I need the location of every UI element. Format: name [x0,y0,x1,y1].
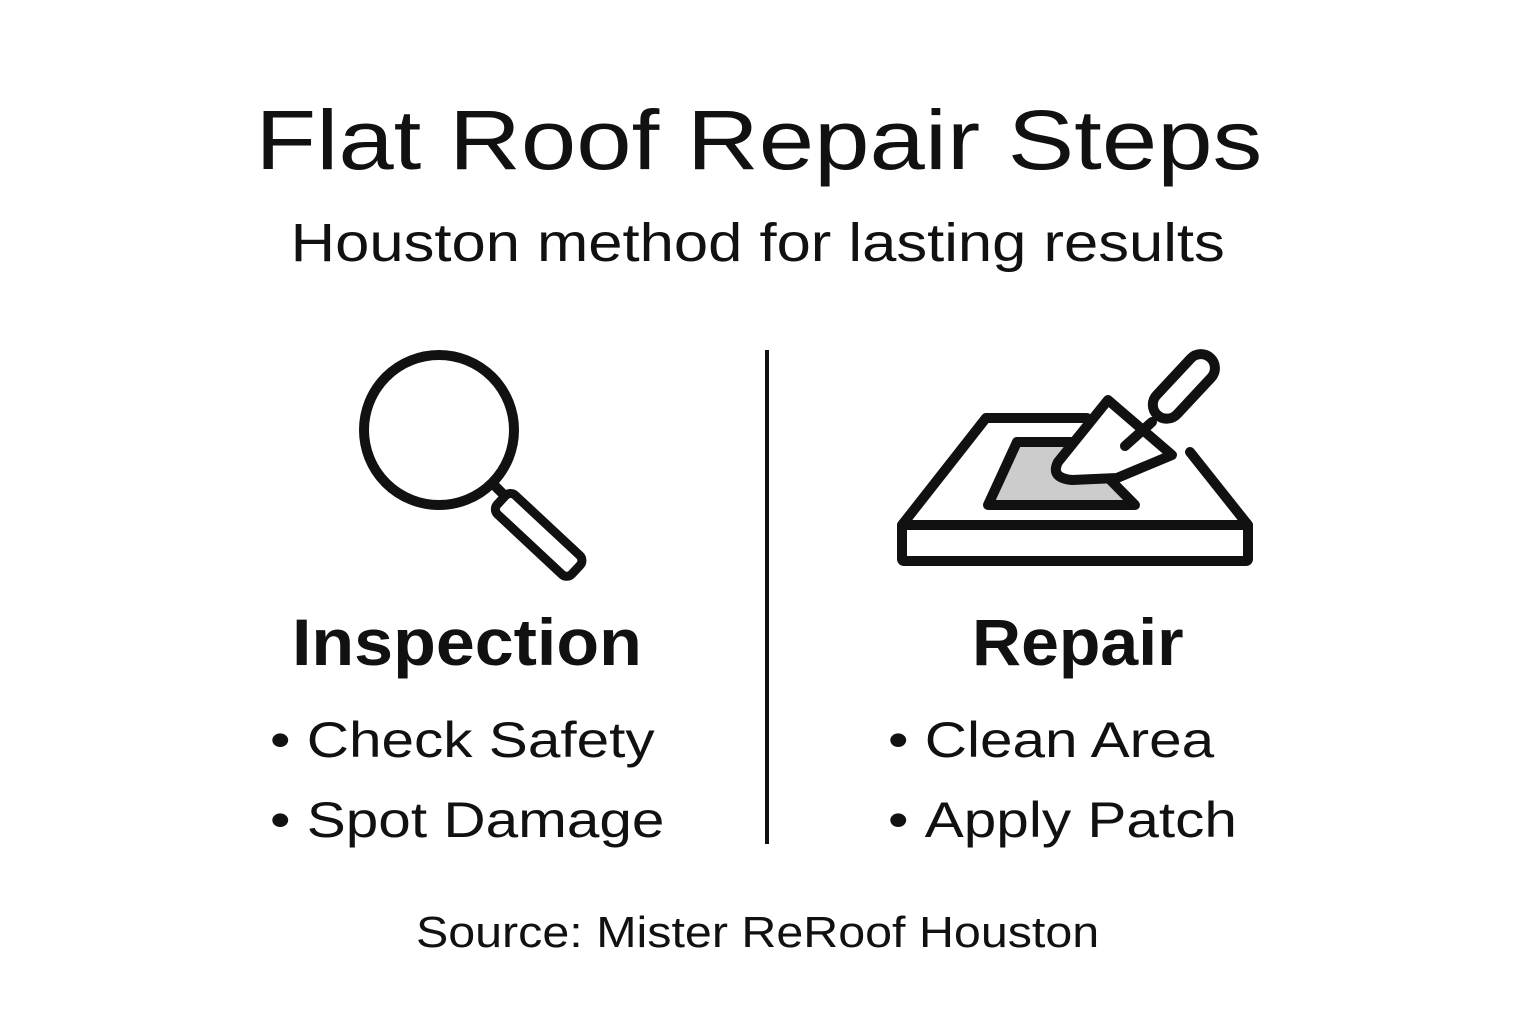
bullets: repair: • Apply Patch [888,792,1237,848]
source: Source: Mister ReRoof Houston [416,908,1100,957]
bullets: inspection: • Check Safety [270,712,655,768]
bullets: inspection [270,712,664,848]
divider [765,350,769,844]
bullets: repair [888,712,1237,848]
bullets: repair: • Clean Area [888,712,1214,768]
bullets: inspection: • Spot Damage [270,792,664,848]
subtitle: Houston method for lasting results [291,213,1225,273]
title: Flat Roof Repair Steps [256,93,1262,187]
heading: Inspection: Inspection [292,605,642,679]
heading: Repair: Repair [972,605,1184,679]
